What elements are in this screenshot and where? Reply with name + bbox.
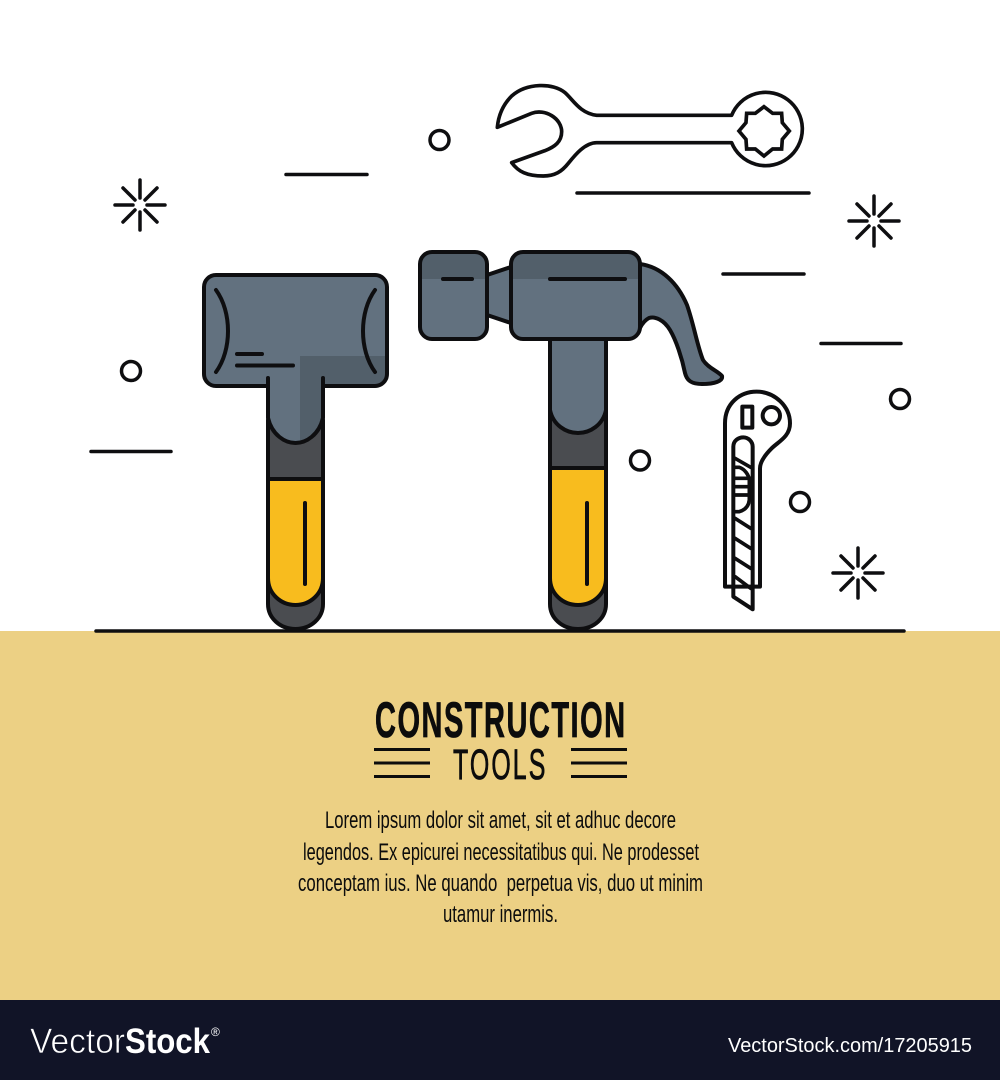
footer image id: VectorStock.com/17205915	[728, 1035, 972, 1057]
icon: sparkle left	[115, 180, 165, 230]
hammer highlights	[443, 277, 625, 281]
footer logo: Stock	[125, 1022, 210, 1061]
decorative dashes	[91, 174, 901, 452]
hammer handle outline	[550, 339, 606, 629]
mallet head shade	[300, 356, 387, 443]
panel: tan text band	[0, 631, 1000, 1000]
footer logo: Vector	[30, 1022, 125, 1061]
mallet handle outline	[268, 420, 323, 629]
hammer connector	[487, 267, 511, 323]
footer logo: ®	[211, 1025, 220, 1039]
hammer neck	[550, 339, 606, 433]
footer bar	[0, 1000, 1000, 1080]
footer logo	[30, 1022, 220, 1061]
icon: claw hammer	[420, 252, 722, 629]
hammer face block	[420, 252, 487, 339]
hammer handle	[550, 339, 606, 629]
body text: legendos. Ex epicurei necessitatibus qui. Ne prodesset	[303, 839, 699, 866]
heading rules right	[571, 750, 627, 776]
heading line one: CONSTRUCTION	[375, 692, 627, 748]
icon: sparkle right	[849, 196, 899, 246]
mallet head outline	[204, 275, 387, 443]
hammer face outline	[420, 252, 487, 339]
ground line	[96, 629, 904, 633]
mallet highlights	[216, 290, 375, 372]
body text: utamur inermis.	[443, 901, 558, 928]
heading rules left	[374, 750, 430, 776]
icon: utility knife	[725, 392, 790, 609]
hammer main shade	[511, 252, 640, 279]
hammer claw	[640, 264, 722, 384]
body text	[298, 807, 703, 928]
body text: conceptam ius. Ne quando perpetua vis, duo ut minim	[298, 870, 703, 897]
icon: sparkle bottom	[833, 548, 883, 598]
icon: mallet	[204, 275, 387, 629]
heading	[374, 692, 627, 789]
icon: wrench	[497, 86, 802, 176]
mallet head fill	[204, 275, 387, 443]
hammer main block	[511, 252, 640, 339]
decorative rings	[122, 130, 910, 512]
mallet grip line	[303, 503, 307, 584]
mallet handle	[268, 420, 323, 629]
heading line two: TOOLS	[453, 741, 547, 789]
body text: Lorem ipsum dolor sit amet, sit et adhuc decore	[325, 807, 676, 834]
hammer yellow grip	[550, 468, 606, 605]
hammer grip line	[585, 503, 589, 584]
mallet yellow grip	[268, 479, 323, 605]
hammer main outline	[511, 252, 640, 339]
hammer face shade	[420, 252, 487, 279]
